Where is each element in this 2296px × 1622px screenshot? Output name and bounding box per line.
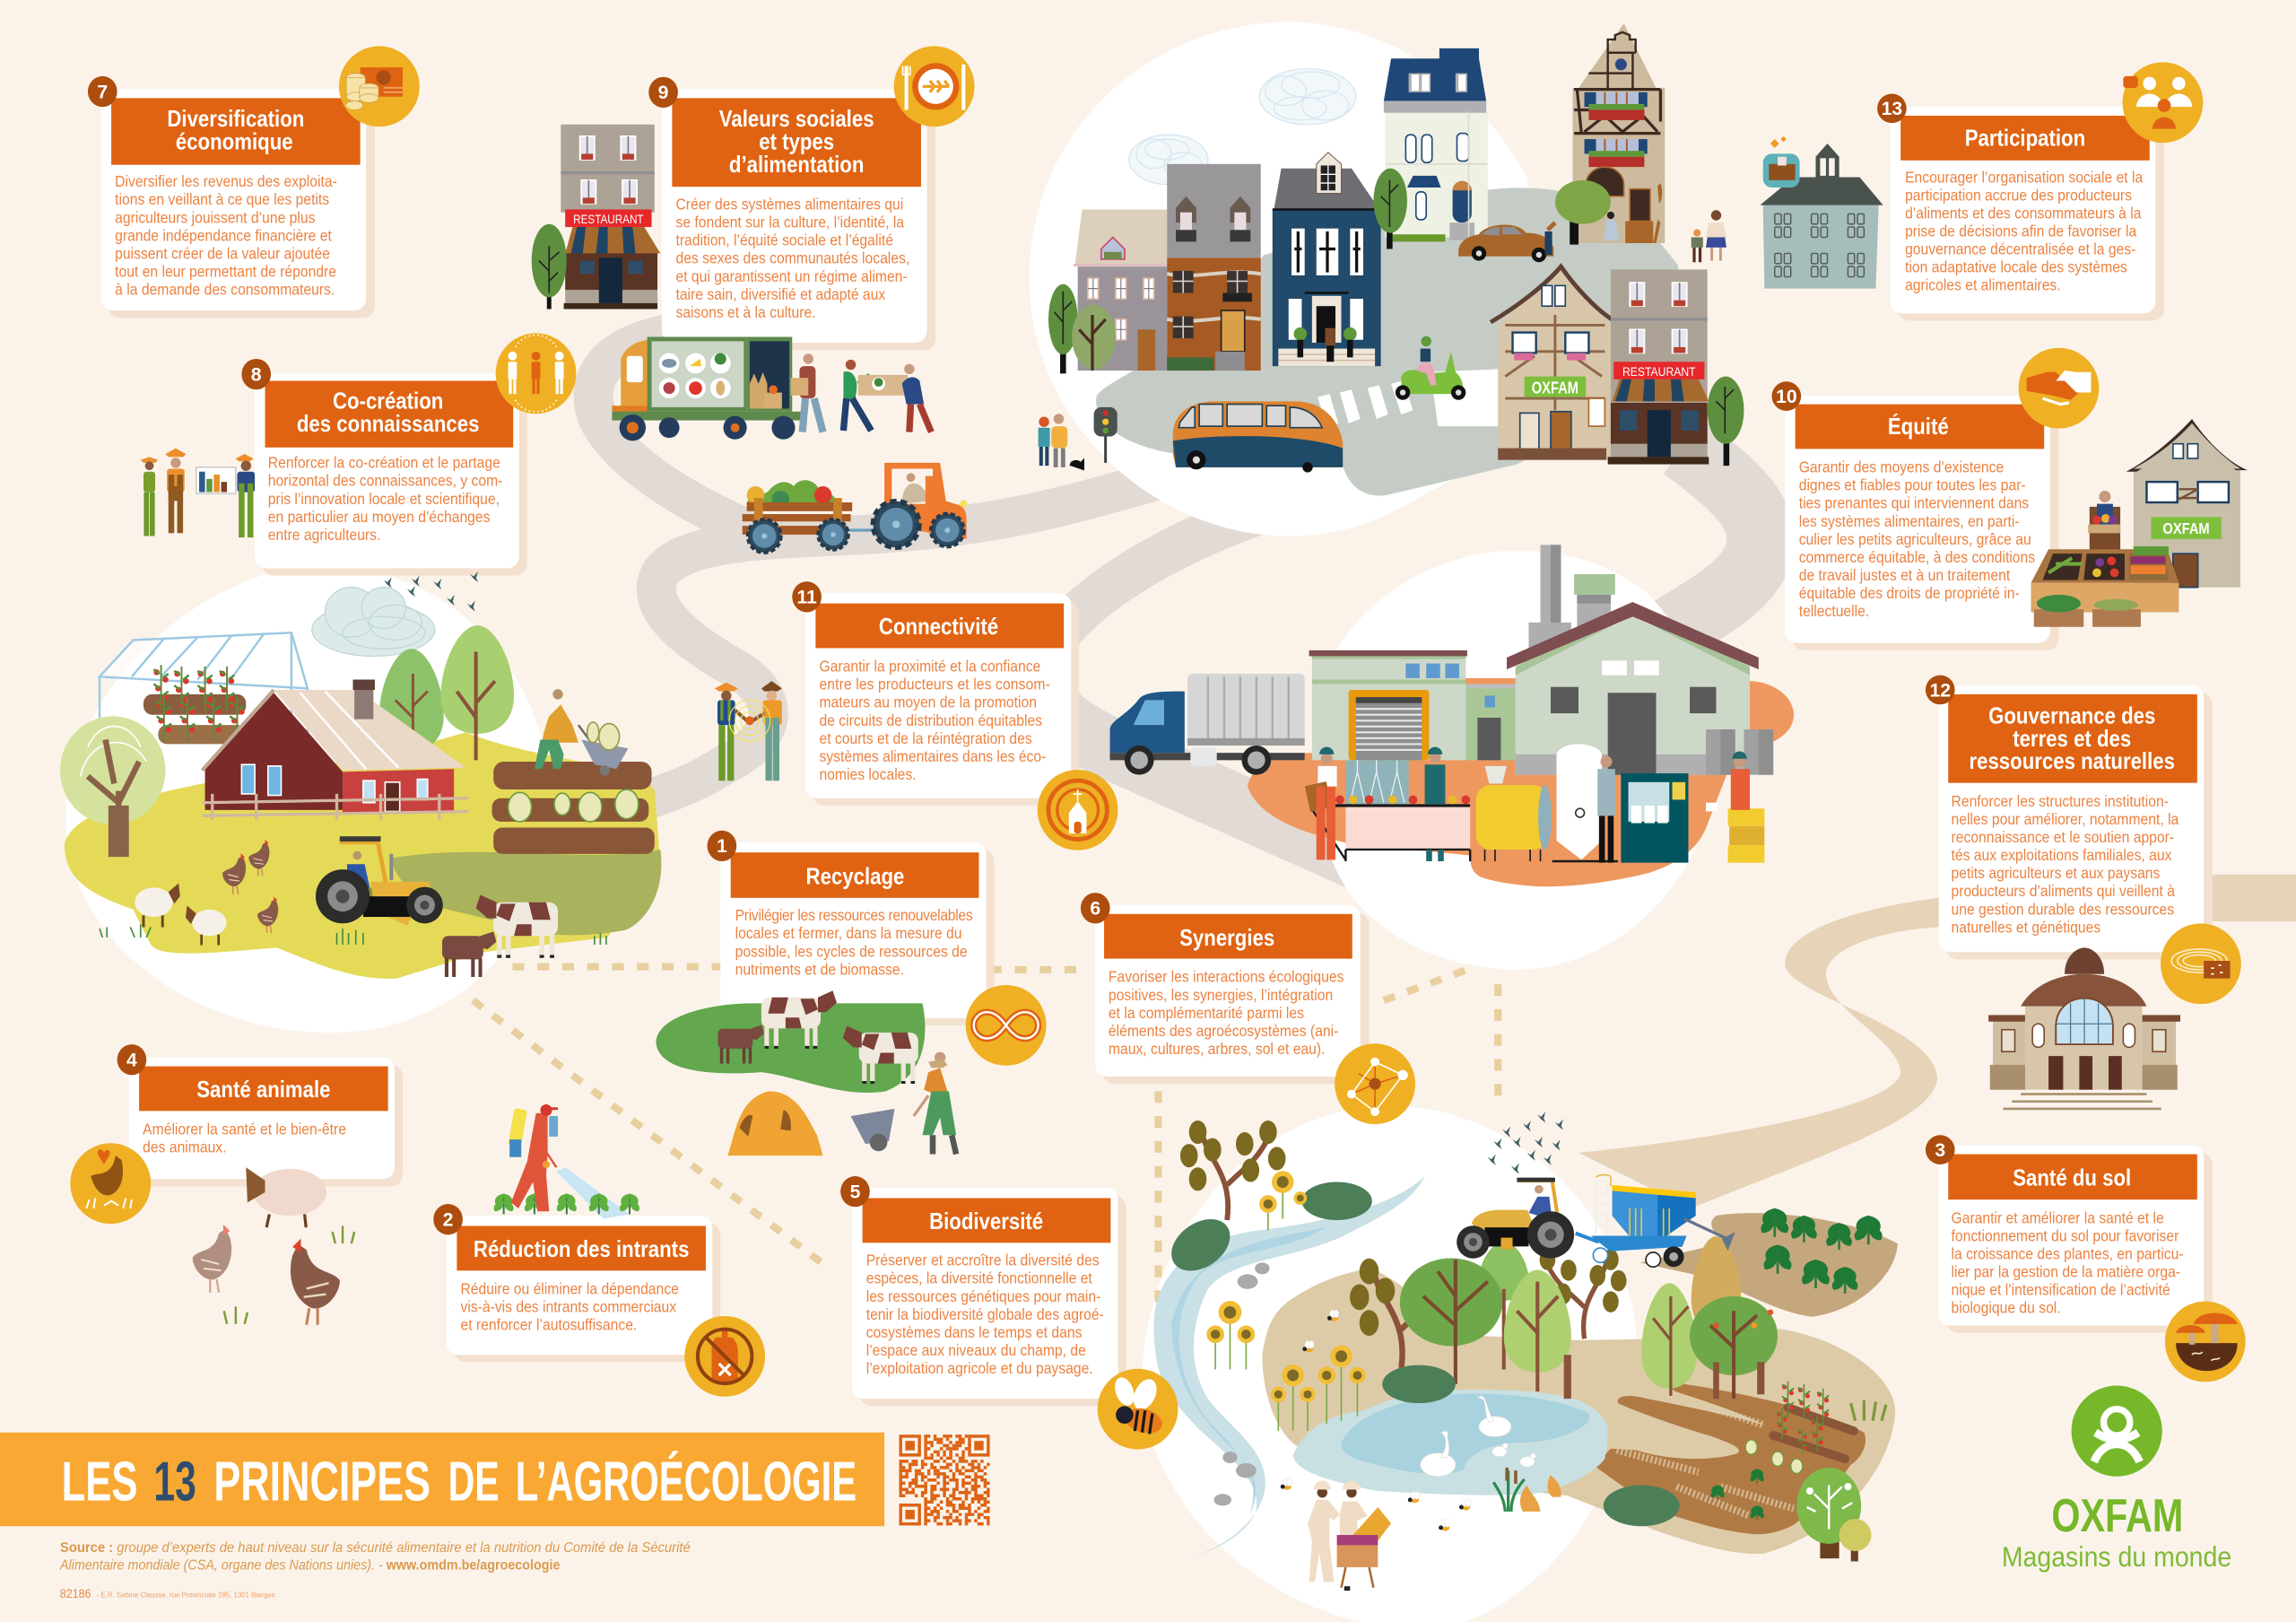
body text: tion adaptative locale des systèmes — [1905, 258, 2127, 276]
middle building — [1465, 678, 1516, 760]
body text: espèces, la diversité fonctionnelle et — [866, 1269, 1092, 1287]
header: Santé animale — [196, 1077, 331, 1103]
header — [815, 604, 1064, 648]
yellow tractor — [316, 836, 443, 926]
badge 13: 13 — [1882, 99, 1902, 119]
body text: locales et fermer, dans la mesure du — [735, 924, 962, 942]
body text: positives, les synergies, l’intégration — [1109, 986, 1333, 1004]
vintage car — [1458, 212, 1620, 262]
header — [672, 98, 921, 187]
main building — [1507, 602, 1759, 775]
body text: Encourager l’organisation sociale et la — [1905, 168, 2144, 186]
body text: Garantir la proximité et la confiance — [819, 658, 1040, 676]
reeds — [1493, 1468, 1561, 1512]
body text: fonctionnement du sol pour favoriser — [1952, 1227, 2179, 1245]
hay stack — [727, 1091, 823, 1155]
grass — [1851, 1400, 1886, 1421]
icon: parliament — [2161, 923, 2241, 1004]
header: terres et des — [2013, 726, 2131, 752]
QR code — [899, 1435, 990, 1525]
title banner: 13 — [153, 1452, 196, 1513]
body text: de circuits de distribution équitables — [819, 711, 1042, 729]
badge 11: 11 — [796, 588, 817, 608]
body text: des sexes des communautés locales, — [675, 249, 909, 267]
header — [731, 852, 978, 898]
body text: nelles pour améliorer, notamment, la — [1952, 810, 2179, 828]
white bubble: factory — [1317, 551, 1710, 970]
body text: taire sain, diversifié et adapté aux — [675, 285, 886, 303]
badge 8: 8 — [251, 364, 262, 385]
body text: participation accrue des producteurs — [1905, 187, 2132, 205]
brown field — [1595, 1382, 1866, 1534]
illustration: cows and hay, recycling — [656, 990, 956, 1155]
illustration: restaurant near card 9: RESTAURANT — [573, 212, 644, 226]
body text: reconnaissance et le soutien appor- — [1952, 828, 2174, 846]
header: Synergies — [1179, 925, 1274, 951]
illustration: ballot building — [1760, 136, 1883, 289]
ground — [65, 732, 660, 979]
body text: agriculteurs jouissent d’une plus — [115, 208, 315, 227]
card 6 — [1081, 893, 1415, 1124]
body text: agricoles et alimentaires. — [1905, 276, 2061, 294]
body text: naturelles et génétiques — [1952, 919, 2100, 937]
source text — [59, 1539, 691, 1574]
illustration: sheep and hens — [193, 1167, 354, 1325]
illustration: market hall building — [1988, 947, 2180, 1109]
badge 6: 6 — [1090, 899, 1100, 920]
cows — [442, 895, 558, 977]
body text: Diversifier les revenus des exploita- — [115, 172, 337, 190]
card 10 — [1772, 348, 2099, 650]
body text: horizontal des connaissances, y com- — [268, 472, 502, 490]
title banner: L’AGROÉCOLOGIE — [516, 1452, 857, 1513]
boxes — [1728, 808, 1764, 863]
body text: et la complémentarité parmi les — [1109, 1004, 1304, 1022]
pond — [1293, 1390, 1608, 1496]
header: Co-création — [333, 388, 443, 414]
sheep — [135, 883, 227, 946]
traffic light — [1094, 407, 1118, 463]
body text: biologique du sol. — [1952, 1299, 2061, 1317]
header: Gouvernance des — [1988, 703, 2155, 729]
body text: tenir la biodiversité globale des agroé- — [866, 1305, 1104, 1323]
card 1 — [708, 831, 1047, 1066]
header: Santé du sol — [2013, 1165, 2131, 1191]
header: Recyclage — [806, 864, 904, 890]
body text: Renforcer la co-création et le partage — [268, 454, 500, 472]
badge 4 — [117, 1044, 146, 1075]
grass — [100, 924, 606, 945]
people loading — [791, 353, 931, 432]
red barn — [202, 680, 468, 820]
icon: hen — [70, 1143, 151, 1224]
imprint: 82186 — [60, 1587, 91, 1600]
illustration: farm — [60, 571, 661, 979]
greenhouse — [100, 632, 308, 754]
body text: culier les petits agriculteurs, grâce au — [1799, 530, 2031, 548]
upper field — [1640, 1213, 1898, 1317]
willow tree — [60, 716, 165, 857]
header: Diversification — [167, 107, 304, 133]
body text: d’aliments et des consommateurs à la — [1905, 205, 2142, 222]
tan road — [1578, 875, 2296, 1208]
illustration: farmers shaking hands — [715, 681, 782, 780]
card 9 — [648, 46, 975, 350]
icon: three people — [496, 333, 576, 414]
green field — [391, 850, 661, 935]
body text: cosystèmes dans le temps et dans — [866, 1323, 1082, 1341]
body text: saisons et à la culture. — [675, 303, 816, 321]
vintage bus — [1173, 401, 1343, 473]
lower field crops — [1745, 1440, 1803, 1473]
cream house — [1384, 48, 1488, 241]
icon: participation — [2123, 62, 2203, 143]
body text: nique et l’intensification de l’activité — [1952, 1281, 2170, 1299]
flowering bush — [1796, 1468, 1872, 1561]
header: économique — [176, 129, 293, 155]
source text: Source : groupe d’experts de haut niveau sur la sécurité alimentaire et la nutrition du Comité de la Sécurité — [60, 1539, 691, 1556]
half-timbered shop — [1491, 266, 1616, 460]
card 3 — [1926, 1135, 2246, 1382]
illustration: countryside — [1154, 1112, 1898, 1591]
body text: ties prenantes qui interviennent dans — [1799, 494, 2029, 512]
body text: Préserver et accroître la diversité des — [866, 1251, 1100, 1269]
card 11 — [792, 581, 1118, 850]
header — [1948, 1155, 2197, 1199]
badge 9: 9 — [658, 83, 669, 103]
badge 12 — [1926, 676, 1955, 704]
body text: à la demande des consommateurs. — [115, 281, 335, 299]
header: Biodiversité — [929, 1208, 1043, 1234]
body text: possible, les cycles de ressources de — [735, 942, 968, 961]
title banner: DE — [448, 1452, 500, 1513]
header — [1948, 694, 2197, 783]
card 4 — [70, 1044, 403, 1224]
birds — [1488, 1112, 1563, 1174]
badge 13 — [1877, 93, 1907, 123]
badge 5 — [840, 1176, 870, 1207]
grey house — [1074, 209, 1169, 371]
badge 9 — [648, 77, 678, 108]
body text: et courts et de la réintégration des — [819, 729, 1032, 747]
trees centre — [1350, 1242, 1627, 1399]
body text: entre les producteurs et les consom- — [819, 676, 1050, 693]
truck — [1110, 674, 1305, 775]
header — [863, 1199, 1110, 1243]
seed hopper — [1576, 1175, 1735, 1267]
body text: Réduire ou éliminer la dépendance — [460, 1280, 679, 1298]
body text: lier par la gestion de la matière orga- — [1952, 1263, 2180, 1281]
restaurant: RESTAURANT — [1622, 364, 1696, 379]
body text: Améliorer la santé et le bien-être — [143, 1121, 346, 1138]
birds — [384, 571, 478, 612]
badge 12: 12 — [1929, 680, 1951, 701]
badge 3 — [1926, 1135, 1955, 1164]
body text: tellectuelle. — [1799, 602, 1869, 620]
icon: soil mushrooms — [2165, 1302, 2246, 1382]
badge 8 — [241, 359, 271, 389]
card 7 — [88, 46, 420, 318]
town ground — [1096, 187, 1684, 496]
imprint — [60, 1587, 275, 1600]
Oxfam logo — [2002, 1385, 2231, 1573]
Oxfam logo: OXFAM — [2051, 1490, 2183, 1542]
field hatching — [1616, 1406, 1794, 1516]
tower house — [1572, 23, 1665, 243]
body text: les systèmes alimentaires, en parti- — [1799, 512, 2020, 530]
half-timbered shop: OXFAM — [1532, 378, 1578, 397]
body text: systèmes alimentaires dans les éco- — [819, 747, 1046, 765]
body text: et renforcer l’autosuffisance. — [460, 1316, 637, 1334]
body text: l’espace aux niveaux du champ, de — [866, 1341, 1086, 1359]
icon: plate — [894, 46, 975, 126]
card 8 — [241, 333, 576, 576]
card 2 — [433, 1204, 765, 1397]
navy house — [1273, 153, 1381, 366]
body text: tradition, l’équité sociale et l’égalité — [675, 231, 893, 249]
body text: Garantir et améliorer la santé et le — [1952, 1208, 2164, 1226]
body text: entre agriculteurs. — [268, 526, 380, 544]
body text: une gestion durable des ressources — [1952, 900, 2174, 918]
header — [139, 1067, 388, 1111]
upper field plants — [1761, 1208, 1883, 1294]
body text: producteurs d’aliments qui veillent à — [1952, 882, 2176, 900]
card 5 — [840, 1176, 1126, 1406]
cloud — [1129, 69, 1356, 185]
dashed connectors — [473, 967, 1498, 1311]
header: Participation — [1965, 126, 2085, 152]
body text: puissent créer de la valeur ajoutée — [115, 245, 330, 263]
cloud — [312, 588, 435, 656]
illustration: factory — [1110, 545, 1794, 886]
source text: Alimentaire mondiale (CSA, organe des Nations unies). - www.omdm.be/agroecologie — [59, 1557, 560, 1574]
header — [1900, 116, 2150, 161]
farmer with wheelbarrow — [535, 689, 628, 775]
header: ressources naturelles — [1969, 749, 2175, 775]
swans — [1421, 1396, 1535, 1477]
parent and child — [1692, 210, 1726, 262]
body text: petits agriculteurs et aux paysans — [1952, 864, 2160, 882]
body text: les ressources génétiques pour main- — [866, 1287, 1100, 1305]
beekeepers and hive — [1308, 1481, 1391, 1591]
processing line — [1310, 729, 1773, 863]
chimney — [1528, 545, 1615, 649]
header: d’alimentation — [729, 152, 864, 178]
header — [457, 1226, 706, 1270]
sunflowers — [1215, 1186, 1357, 1431]
illustration: tractor and trailer — [743, 463, 967, 553]
farmer and wheelbarrow — [851, 1052, 956, 1155]
white bubble: countryside — [1142, 1106, 1638, 1622]
title banner: LES — [62, 1452, 137, 1513]
brick house — [1167, 164, 1261, 371]
body text: pris l’innovation locale et scientifique, — [268, 490, 500, 508]
header: et types — [759, 129, 834, 155]
Oxfam logo: Magasins du monde — [2002, 1540, 2231, 1573]
farm tractor — [1457, 1178, 1574, 1259]
header: Connectivité — [879, 614, 998, 640]
restaurant — [1608, 269, 1709, 465]
trees — [1048, 169, 1744, 466]
body text: éléments des agroécosystèmes (ani- — [1109, 1022, 1338, 1040]
header: Réduction des intrants — [474, 1236, 689, 1262]
body text: Garantir des moyens d’existence — [1799, 458, 2004, 476]
illustration: restaurant near card 9 — [532, 125, 660, 309]
illustration: Oxfam shop and market — [2031, 419, 2248, 627]
bushes — [1161, 1182, 1680, 1526]
white bubble: town — [1030, 22, 1537, 536]
badge 7 — [88, 76, 117, 107]
icon: infinity — [966, 985, 1047, 1066]
header — [1796, 405, 2044, 449]
rocks — [1213, 1262, 1270, 1505]
orange ground — [1248, 681, 1794, 886]
body text: la croissance des plantes, en particu- — [1952, 1245, 2184, 1263]
body text: vis-à-vis des intrants commerciaux — [460, 1298, 677, 1316]
badge 11 — [792, 581, 822, 612]
icon: handshake — [2019, 348, 2099, 429]
icon: church — [1038, 770, 1118, 850]
body text: tout en leur permettant de répondre — [115, 263, 336, 281]
body text: l’exploitation agricole et du paysage. — [866, 1359, 1093, 1377]
bees — [1281, 1310, 1471, 1530]
tall trees — [379, 625, 514, 760]
card 13 — [1877, 62, 2203, 321]
badge 4: 4 — [126, 1051, 137, 1071]
header: Valeurs sociales — [719, 107, 874, 133]
badge 2: 2 — [443, 1210, 453, 1231]
body text: maux, cultures, arbres, sol et eau). — [1109, 1040, 1325, 1058]
chickens — [222, 840, 278, 933]
badge 6 — [1081, 893, 1110, 923]
body text: Renforcer les structures institution- — [1952, 792, 2169, 810]
scooter — [1396, 336, 1465, 400]
soil rows — [492, 762, 655, 854]
badge 10 — [1772, 381, 1801, 411]
title banner: PRINCIPES — [213, 1452, 430, 1513]
body text: Créer des systèmes alimentaires qui — [675, 196, 903, 214]
icon: bee — [1098, 1369, 1178, 1450]
illustration: Oxfam shop and market: OXFAM — [2162, 519, 2210, 537]
body text: en particulier au moyen d’échanges — [268, 508, 490, 526]
body text: grande indépendance financière et — [115, 227, 332, 245]
walkers with dog — [1039, 414, 1083, 470]
river — [1154, 1176, 1425, 1557]
tree top-left — [1180, 1121, 1285, 1220]
body text: gouvernance décentralisée et la ges- — [1905, 240, 2135, 258]
body text: de travail justes et à un traitement — [1799, 566, 2011, 584]
icon: money — [339, 46, 420, 126]
illustration: town — [1039, 23, 1744, 496]
body text: commerce équitable, à des conditions — [1799, 548, 2035, 566]
workers — [1305, 747, 1750, 863]
crosswalk — [1318, 369, 1498, 428]
icon: network — [1335, 1043, 1415, 1124]
badge 2 — [433, 1204, 463, 1234]
body text: tions en veillant à ce que les petits — [115, 190, 329, 208]
imprint: - E.R. Sabine Clausse, rue Provinciale 285, 1301 Bierges — [97, 1591, 275, 1599]
title banner — [0, 1433, 884, 1526]
badge 7: 7 — [97, 82, 108, 102]
tomato plants — [1773, 1382, 1854, 1459]
badge 1 — [708, 831, 736, 861]
body text: des animaux. — [143, 1138, 227, 1156]
white bubble: farm — [65, 564, 553, 1033]
body text: équitable des droits de propriété in- — [1799, 584, 2020, 602]
body text: prise de décisions afin de favoriser la — [1905, 222, 2137, 240]
header — [111, 98, 361, 165]
left building — [1309, 650, 1467, 760]
grey roads — [594, 329, 1761, 864]
header — [265, 380, 513, 448]
body text: mateurs au moyen de la promotion — [819, 693, 1037, 711]
body text: nomies locales. — [819, 765, 917, 783]
illustration: food truck and people — [612, 337, 931, 440]
illustration: farmers with chart — [141, 449, 255, 537]
cabbages — [509, 789, 639, 822]
badge 1: 1 — [717, 836, 727, 857]
illustration: person spraying crops — [494, 1104, 639, 1218]
body text: nutriments et de biomasse. — [735, 961, 904, 979]
badge 10: 10 — [1776, 387, 1797, 407]
body text: dignes et fiables pour toutes les par- — [1799, 476, 2026, 494]
body text: Privilégier les ressources renouvelables — [735, 906, 972, 924]
card 12 — [1926, 676, 2241, 1004]
tan land — [1262, 1269, 1895, 1554]
header — [1104, 914, 1352, 959]
body text: tés aux exploitations familiales, aux — [1952, 846, 2172, 864]
icon: no chemicals — [684, 1316, 765, 1397]
header: Équité — [1888, 413, 1949, 440]
body text: et qui garantissent un régime alimen- — [675, 267, 908, 285]
badge 5: 5 — [850, 1182, 861, 1203]
header: des connaissances — [297, 411, 479, 437]
trees right — [1641, 1236, 1778, 1399]
tomato rows — [144, 665, 246, 744]
body text: Favoriser les interactions écologiques — [1109, 968, 1344, 986]
body text: se fondent sur la culture, l’identité, la — [675, 214, 905, 231]
badge 3: 3 — [1935, 1140, 1945, 1161]
